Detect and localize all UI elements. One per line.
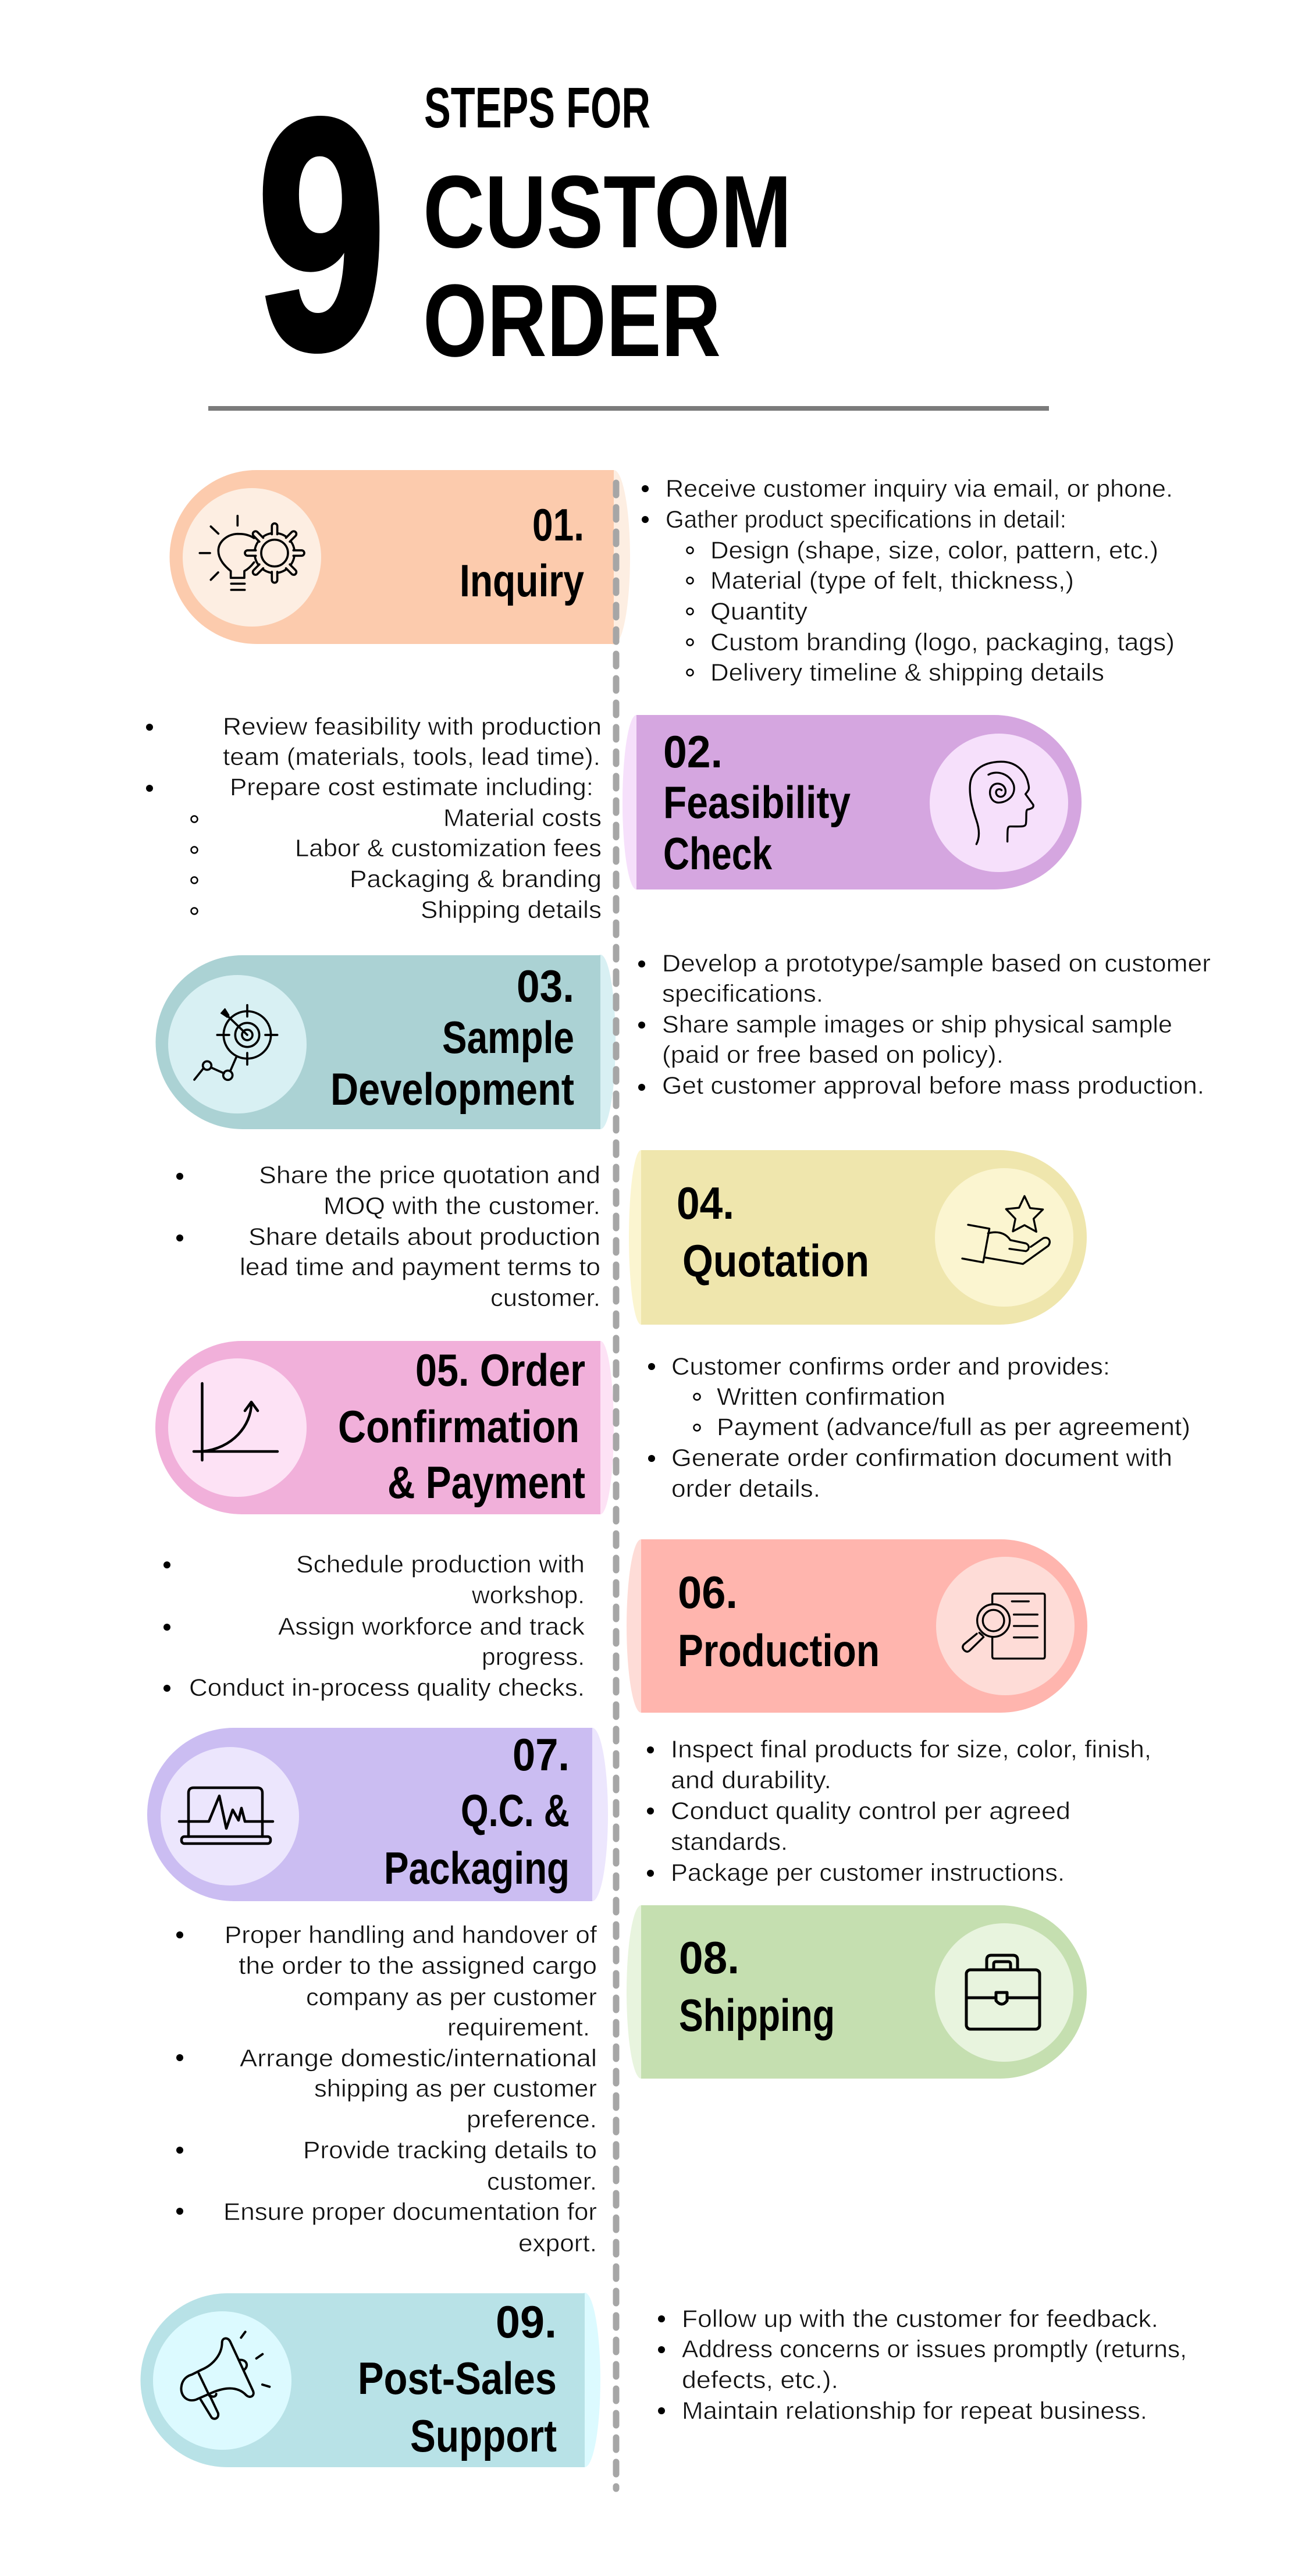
step 2 heading: Check	[663, 828, 772, 879]
step 1 heading: Inquiry	[460, 555, 584, 606]
panel: step 8 shipping	[627, 1905, 1087, 2079]
icon: head with spiral	[970, 762, 1033, 844]
text block: step 8 details: company as per customer	[306, 1983, 597, 2011]
text block: step 1 details: Quantity	[710, 597, 808, 625]
text block: step 6 details: Assign workforce and track	[278, 1613, 585, 1640]
icon: briefcase	[966, 1955, 1040, 2029]
text block: step 9 details: Maintain relationship for repeat business.	[682, 2397, 1147, 2424]
step 9 heading: 09.	[496, 2296, 557, 2347]
text block: step 3 details: (paid or free based on policy).	[662, 1041, 1004, 1068]
text block: step 5 details: Payment (advance/full as per agreement)	[717, 1413, 1190, 1440]
step 1 heading	[460, 499, 584, 606]
text block: step 1 details: Receive customer inquiry via email, or phone.	[666, 475, 1173, 502]
text block: step 1 details: Material (type of felt, thickness,)	[710, 567, 1074, 594]
text block: step 8 details: customer.	[487, 2168, 597, 2195]
text block: step 8 details: shipping as per customer	[314, 2075, 597, 2102]
step 9 heading: Post-Sales	[358, 2353, 557, 2404]
step 9 heading	[358, 2296, 557, 2461]
big numeral 9: 9	[257, 51, 386, 418]
text block: step 3 details: Get customer approval before mass production.	[662, 1072, 1204, 1099]
title line: steps for: STEPS FOR	[424, 76, 650, 140]
step 8 heading: 08.	[679, 1932, 739, 1983]
icon: target with arrow	[194, 1005, 278, 1080]
step 2 heading	[663, 726, 851, 879]
step 6 heading	[678, 1567, 880, 1676]
text block: step 9 details	[658, 2305, 1187, 2424]
text block: step 6 details: workshop.	[471, 1581, 585, 1609]
icon: magnifier over document	[963, 1593, 1045, 1659]
step 9 heading: Support	[410, 2410, 557, 2461]
text block: step 6 details: Conduct in-process quality checks.	[189, 1674, 585, 1701]
panel: step 5 order confirmation and payment	[155, 1341, 614, 1514]
panel: step 6 production	[627, 1539, 1087, 1713]
step 5 heading: Confirmation	[338, 1401, 579, 1452]
text block: step 4 details	[176, 1161, 600, 1311]
text block: step 7 details: Package per customer instructions.	[671, 1859, 1065, 1886]
step 4 heading: 04.	[677, 1177, 734, 1229]
text block: step 2 details: Labor & customization fees	[295, 834, 602, 862]
step 1 heading: 01.	[532, 499, 584, 550]
text block: step 7 details: Conduct quality control per agreed	[671, 1797, 1070, 1824]
step 3 heading: Sample	[442, 1012, 574, 1063]
title	[257, 51, 792, 418]
text block: step 7 details: Inspect final products for size, color, finish,	[671, 1735, 1151, 1763]
text block: step 3 details: specifications.	[662, 980, 823, 1007]
text block: step 8 details: Proper handling and handover of	[225, 1921, 597, 1948]
step 5 heading: & Payment	[387, 1457, 585, 1508]
step 2 heading: Feasibility	[663, 777, 851, 828]
step 6 heading: 06.	[678, 1567, 738, 1618]
text block: step 4 details: customer.	[490, 1284, 600, 1311]
step 5 heading	[338, 1344, 585, 1508]
text block: step 1 details: Gather product specifications in detail:	[666, 506, 1066, 533]
step 7 heading: Packaging	[384, 1842, 570, 1894]
text block: step 7 details: and durability.	[671, 1766, 831, 1794]
icon: laptop with pulse	[179, 1788, 273, 1844]
text block: step 3 details	[638, 949, 1211, 1099]
text block: step 2 details	[146, 713, 602, 923]
icon: growth chart	[194, 1383, 278, 1460]
text block: step 4 details: MOQ with the customer.	[323, 1192, 600, 1219]
text block: step 5 details: order details.	[671, 1475, 820, 1502]
text block: step 4 details: Share details about production	[248, 1223, 600, 1250]
text block: step 9 details: defects, etc.).	[682, 2366, 838, 2393]
text block: step 5 details: Customer confirms order and provides:	[671, 1353, 1110, 1380]
icon: megaphone	[181, 2332, 269, 2419]
title line: order: ORDER	[423, 263, 721, 378]
text block: step 8 details: Ensure proper documentation for	[223, 2198, 597, 2225]
text block: step 1 details: Delivery timeline & shipping details	[710, 659, 1104, 686]
step 4 heading	[677, 1177, 869, 1286]
text block: step 8 details: the order to the assigned cargo	[239, 1952, 597, 1979]
text block: step 4 details: lead time and payment terms to	[240, 1253, 600, 1280]
text block: step 6 details	[163, 1550, 585, 1701]
step 7 heading: 07.	[513, 1729, 570, 1780]
text block: step 2 details: Shipping details	[421, 896, 602, 923]
step 7 heading	[384, 1729, 570, 1894]
step 6 heading: Production	[678, 1625, 880, 1676]
text block: step 8 details: export.	[518, 2229, 597, 2257]
panel: step 2 feasibility check	[623, 715, 1082, 889]
step 5 heading: 05. Order	[415, 1344, 585, 1396]
text block: step 2 details: team (materials, tools, lead time).	[223, 743, 600, 770]
step 7 heading: Q.C. &	[461, 1785, 570, 1836]
panel: step 7 QC and packaging	[147, 1728, 608, 1901]
text block: step 5 details: Generate order confirmation document with	[671, 1444, 1172, 1471]
title line: custom: CUSTOM	[423, 154, 792, 269]
text block: step 5 details	[648, 1353, 1190, 1502]
text block: step 1 details: Design (shape, size, color, pattern, etc.)	[710, 536, 1158, 564]
icon: hand holding star	[962, 1196, 1050, 1264]
step 3 heading	[330, 960, 574, 1115]
text block: step 8 details: Arrange domestic/international	[240, 2044, 597, 2072]
text block: step 7 details: standards.	[671, 1828, 788, 1855]
text block: step 8 details: Provide tracking details to	[303, 2136, 597, 2164]
step 3 heading: Development	[330, 1063, 574, 1115]
text block: step 1 details	[642, 475, 1175, 686]
text block: step 7 details	[647, 1735, 1151, 1886]
panel: step 1 inquiry	[170, 470, 630, 645]
step 3 heading: 03.	[517, 960, 574, 1012]
text block: step 8 details: requirement.	[447, 2013, 590, 2041]
panel: step 4 quotation	[629, 1150, 1087, 1325]
text block: step 4 details: Share the price quotation and	[259, 1161, 600, 1189]
text block: step 8 details	[176, 1921, 597, 2257]
step 2 heading: 02.	[663, 726, 723, 777]
text block: step 9 details: Address concerns or issues promptly (returns,	[682, 2335, 1187, 2362]
text block: step 1 details: Custom branding (logo, packaging, tags)	[710, 628, 1175, 656]
panel: step 9 post-sales support	[141, 2293, 600, 2467]
text block: step 6 details: Schedule production with	[296, 1550, 585, 1578]
text block: step 5 details: Written confirmation	[717, 1383, 945, 1410]
text block: step 6 details: progress.	[482, 1643, 585, 1670]
step 8 heading: Shipping	[679, 1990, 835, 2041]
text block: step 9 details: Follow up with the customer for feedback.	[682, 2305, 1158, 2332]
step 4 heading: Quotation	[682, 1235, 869, 1286]
text block: step 2 details: Review feasibility with production	[223, 713, 602, 740]
step 8 heading	[679, 1932, 835, 2041]
text block: step 8 details: preference.	[467, 2105, 597, 2133]
text block: step 2 details: Prepare cost estimate including:	[230, 773, 593, 800]
panel: step 3 sample development	[156, 955, 616, 1129]
icon: lightbulb and gear	[200, 516, 304, 590]
text block: step 3 details: Share sample images or ship physical sample	[662, 1011, 1172, 1038]
text block: step 2 details: Packaging & branding	[350, 865, 602, 892]
text block: step 3 details: Develop a prototype/sample based on customer	[662, 949, 1211, 977]
text block: step 2 details: Material costs	[443, 804, 602, 831]
